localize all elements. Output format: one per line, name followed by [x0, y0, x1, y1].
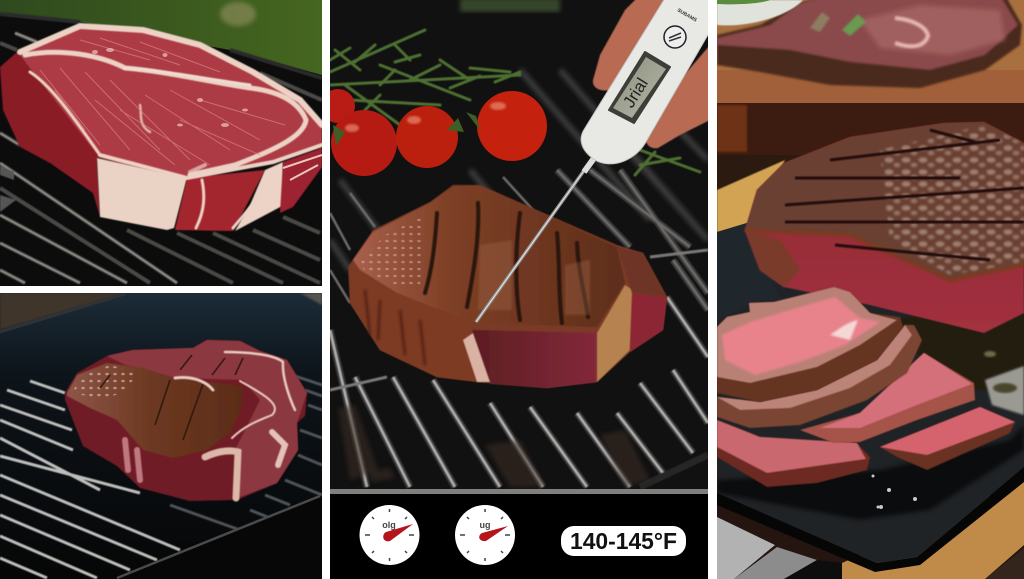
grill marks [100, 355, 243, 440]
gauge 2 [455, 505, 515, 565]
steak slices [717, 287, 1015, 487]
red end [630, 293, 667, 352]
coals glow [338, 405, 650, 487]
sear lines [785, 130, 1024, 260]
fat front block [97, 158, 187, 230]
hand [593, 0, 710, 148]
grill tray corner [236, 496, 322, 532]
seared top [745, 122, 1024, 280]
background: blurred lawn [0, 0, 322, 75]
salt crystals [872, 474, 917, 509]
left side [350, 290, 480, 382]
slice: bottom right [880, 407, 1015, 470]
grill grate near [330, 170, 708, 487]
muscle grain [40, 38, 285, 165]
slice: second [717, 325, 922, 428]
background: blurred top [460, 0, 560, 12]
slate board [717, 222, 1024, 572]
temperature label: 140-145°F [570, 528, 677, 554]
logo [664, 26, 686, 48]
gauge 1 [360, 505, 420, 565]
panel: temperature bar [330, 489, 708, 579]
slice: third [800, 353, 975, 443]
sheen [74, 366, 133, 396]
fat edge [597, 285, 633, 382]
lcd display: Jrial [619, 75, 652, 111]
speckled fat [880, 125, 1024, 275]
side muscle [175, 170, 265, 231]
gauge 2: ug [480, 520, 490, 530]
knife [717, 517, 842, 579]
thermometer [476, 0, 714, 322]
fat marbling [20, 26, 322, 228]
grilled steak [348, 185, 667, 388]
cutting board [717, 160, 785, 233]
grill marks [425, 203, 588, 323]
slice: top [717, 287, 903, 402]
seared top [353, 187, 625, 327]
gauge 1: olg [382, 520, 396, 530]
raw steak [0, 25, 322, 231]
lcd display [609, 52, 670, 123]
panel: thermometer check [321, 0, 714, 490]
background wall [0, 293, 125, 330]
meat juices [984, 351, 1024, 415]
upper meat [107, 340, 307, 497]
panel: raw steak on grill [0, 0, 322, 286]
fat streaks [125, 352, 295, 498]
seared top [67, 363, 243, 458]
steak top face [17, 25, 322, 180]
seared steak [65, 340, 307, 501]
grill frame [0, 294, 125, 332]
brown edge [745, 230, 1024, 280]
red cut face [470, 330, 597, 388]
red side [745, 122, 1024, 333]
wood table top [717, 0, 1024, 215]
grill grate [0, 376, 322, 578]
slice: bottom left [717, 420, 870, 487]
body [581, 0, 714, 164]
tomatoes [321, 89, 547, 176]
background steak [717, 0, 1022, 88]
pale cut strip [463, 333, 490, 382]
panel: seared steak on grill [0, 293, 322, 579]
steak side [0, 52, 100, 217]
herbs [330, 30, 700, 175]
sheen [361, 218, 421, 284]
grill grate far [330, 70, 708, 270]
grill grate [0, 14, 322, 283]
salad bowl [717, 0, 803, 25]
panel: resting and slicing [717, 0, 1024, 579]
whole grilled steak [745, 122, 1024, 333]
probe [476, 154, 597, 322]
brand text: SUBAMS [676, 8, 698, 24]
